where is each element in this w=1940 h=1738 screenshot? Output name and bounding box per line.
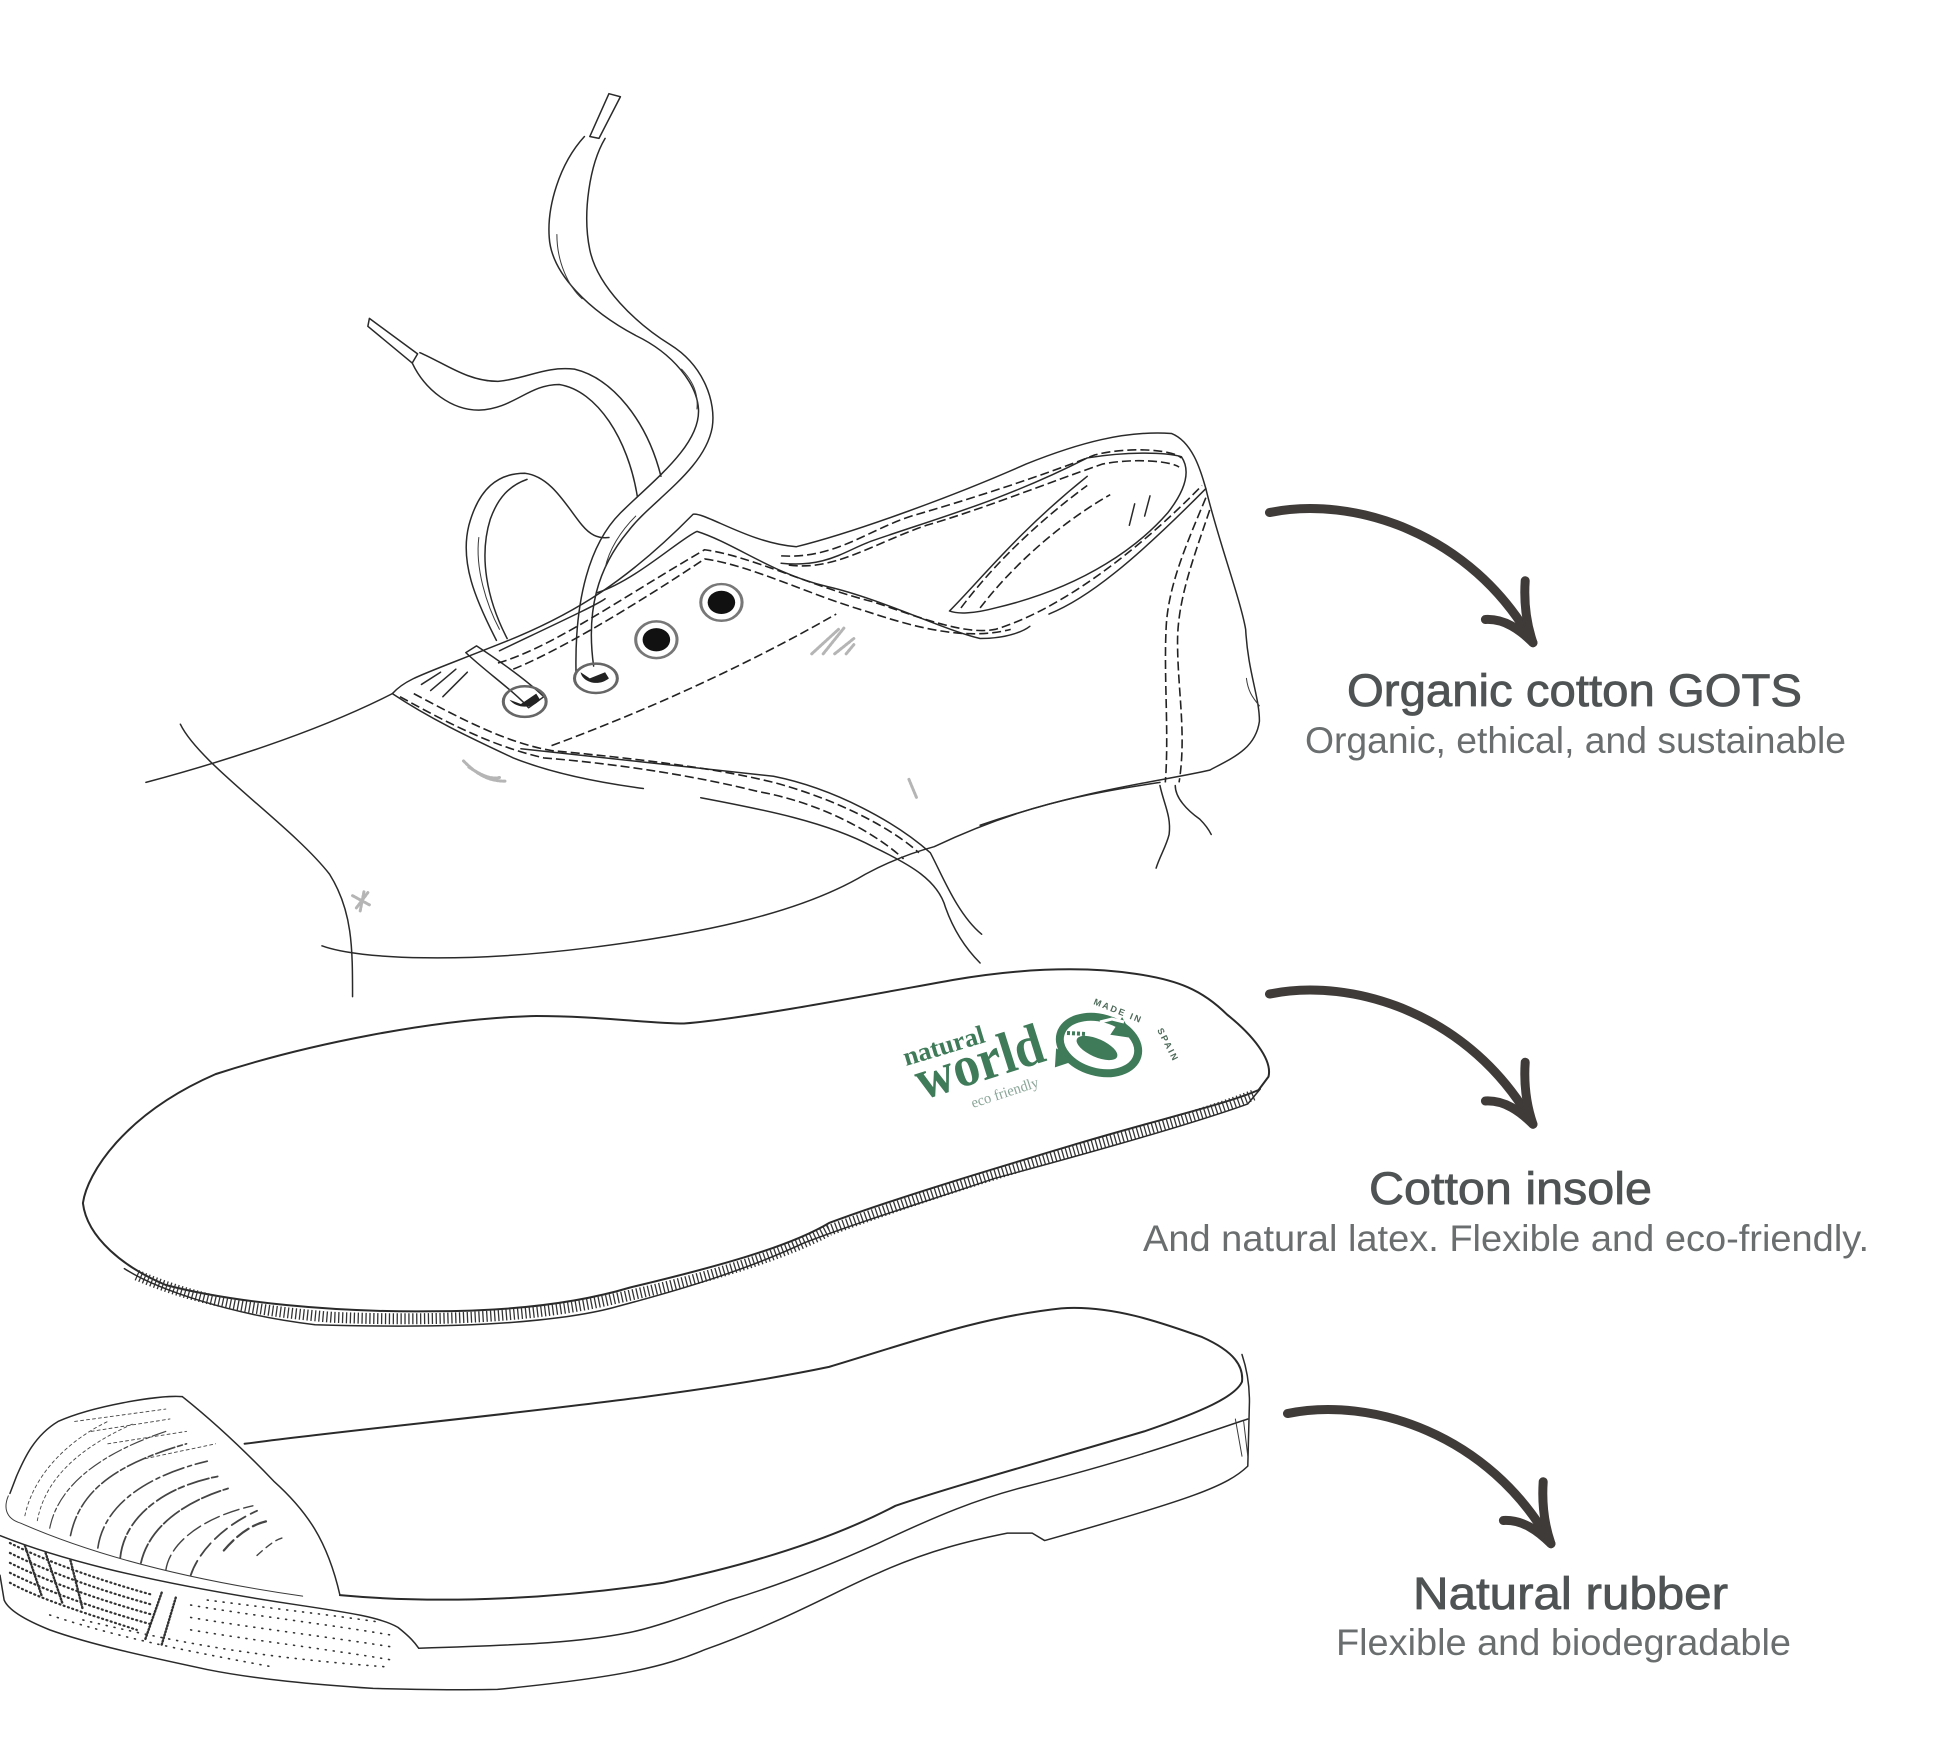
- arrow: to cotton insole: [1269, 990, 1533, 1124]
- illustration: cotton insole: [83, 969, 1269, 1326]
- heading: Natural rubber: [1413, 1568, 1728, 1619]
- natural world logo: [899, 997, 1181, 1112]
- lace through eyelet: [421, 646, 544, 708]
- description: Flexible and biodegradable: [1336, 1622, 1791, 1663]
- eyelets: [503, 584, 742, 717]
- label: natural rubber: [1336, 1568, 1791, 1663]
- label: organic cotton: [1305, 665, 1846, 761]
- logo made in text: SPAIN: [1155, 1026, 1181, 1064]
- vamp stitching band: [392, 614, 982, 963]
- insole top outline: [83, 969, 1269, 1311]
- toe cap: [0, 1396, 1248, 1648]
- description: And natural latex. Flexible and eco-friendly.: [1143, 1218, 1869, 1259]
- logo wordmark: world: [906, 1011, 1052, 1112]
- heading: Cotton insole: [1369, 1163, 1652, 1214]
- short shoelace: [368, 318, 661, 640]
- shoe sole line and toe: [146, 694, 1160, 997]
- description: Organic, ethical, and sustainable: [1305, 720, 1846, 761]
- pencil shading marks: [353, 628, 917, 911]
- heading: Organic cotton GOTS: [1347, 665, 1802, 716]
- arrow: to organic cotton: [1269, 509, 1533, 643]
- heel seam: [1156, 498, 1259, 868]
- long shoelace: [549, 94, 713, 672]
- logo wordmark: natural: [899, 1020, 988, 1072]
- outsole outlines: [0, 1308, 1249, 1690]
- collar outline: [392, 433, 1259, 825]
- logo made in text: [1092, 997, 1181, 1064]
- label: cotton insole: [1143, 1163, 1869, 1259]
- logo recycling circle with foot: [1053, 1008, 1145, 1082]
- illustration: natural rubber outsole: [0, 1308, 1249, 1690]
- illustration: canvas shoe upper with laces: [146, 94, 1259, 997]
- insole side hatching: [124, 1089, 1260, 1326]
- arrow: to natural rubber: [1287, 1410, 1551, 1544]
- toe cap ribs: [25, 1409, 282, 1575]
- outsole stipple tread: [10, 1543, 394, 1667]
- logo made in text: MADE IN: [1092, 997, 1144, 1025]
- logo wordmark: eco friendly: [969, 1075, 1041, 1112]
